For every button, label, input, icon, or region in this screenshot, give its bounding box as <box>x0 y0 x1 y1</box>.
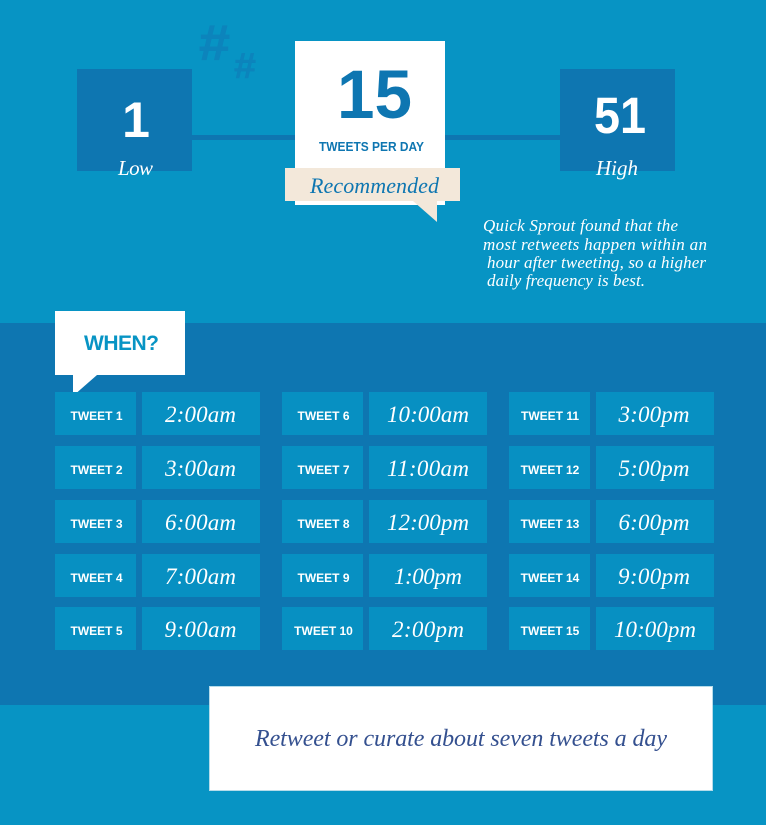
schedule: column 1: TWEET 5 <box>70 624 123 638</box>
schedule: column 1: 7:00am <box>165 564 236 589</box>
panel: recommended <box>285 41 460 222</box>
icon: small hashtag: # <box>234 45 256 86</box>
schedule: column 3: TWEET 14 <box>521 571 580 585</box>
schedule: column 3 <box>509 392 714 650</box>
text block: quick sprout note <box>483 216 707 290</box>
panel: recommended: Recommended <box>309 173 440 198</box>
schedule: column 2: TWEET 8 <box>297 517 350 531</box>
schedule: column 3: 9:00pm <box>618 564 690 589</box>
panel: recommended: 15 <box>337 56 412 133</box>
dark band: schedule panel background <box>0 323 766 705</box>
panel: high <box>560 69 675 180</box>
schedule: column 2: 1:00pm <box>394 564 462 589</box>
schedule: column 3: TWEET 15 <box>521 624 580 638</box>
text block: quick sprout note: hour after tweeting, so a higher <box>487 253 706 272</box>
schedule: column 3: 10:00pm <box>614 617 696 642</box>
schedule: column 2 <box>282 392 487 650</box>
schedule: column 2: 12:00pm <box>387 510 469 535</box>
schedule: column 2: 2:00pm <box>392 617 464 642</box>
connector line <box>192 135 560 140</box>
text block: quick sprout note: Quick Sprout found that the <box>483 216 678 235</box>
schedule: column 1: 2:00am <box>165 402 236 427</box>
schedule: column 2: TWEET 7 <box>297 463 350 477</box>
schedule: column 3: TWEET 13 <box>521 517 580 531</box>
schedule: column 1: TWEET 3 <box>70 517 123 531</box>
text block: quick sprout note: daily frequency is best. <box>487 271 645 290</box>
schedule: column 3: 3:00pm <box>618 402 690 427</box>
schedule: column 3: 6:00pm <box>618 510 690 535</box>
panel: high: 51 <box>594 87 646 144</box>
schedule: column 1: 9:00am <box>164 617 236 642</box>
panel: high: High <box>595 156 638 180</box>
panel: recommended: TWEETS PER DAY <box>319 139 424 154</box>
schedule: column 2: TWEET 9 <box>297 571 350 585</box>
schedule: column 1: TWEET 4 <box>70 571 123 585</box>
schedule: column 1 <box>55 392 260 650</box>
schedule: column 3: TWEET 11 <box>521 409 579 423</box>
icon: large hashtag: # <box>199 15 230 71</box>
schedule: column 2: 11:00am <box>387 456 469 481</box>
schedule: column 1: TWEET 2 <box>70 463 123 477</box>
panel: low <box>77 69 192 180</box>
schedule: column 2: 10:00am <box>387 402 469 427</box>
schedule: column 2: TWEET 6 <box>297 409 350 423</box>
schedule: column 1: 6:00am <box>165 510 236 535</box>
schedule: column 1: 3:00am <box>164 456 236 481</box>
panel: low: 1 <box>122 92 150 148</box>
schedule: column 1: TWEET 1 <box>70 409 123 423</box>
callout: when <box>55 311 185 396</box>
panel: retweet callout: Retweet or curate about seven tweets a day <box>254 726 667 752</box>
schedule: column 3: 5:00pm <box>618 456 690 481</box>
text block: quick sprout note: most retweets happen within an <box>483 235 707 254</box>
panel: low: Low <box>117 156 153 180</box>
schedule: column 3: TWEET 12 <box>521 463 580 477</box>
schedule: column 2: TWEET 10 <box>294 624 353 638</box>
callout: when: WHEN? <box>84 332 159 355</box>
panel: retweet callout <box>210 686 712 790</box>
